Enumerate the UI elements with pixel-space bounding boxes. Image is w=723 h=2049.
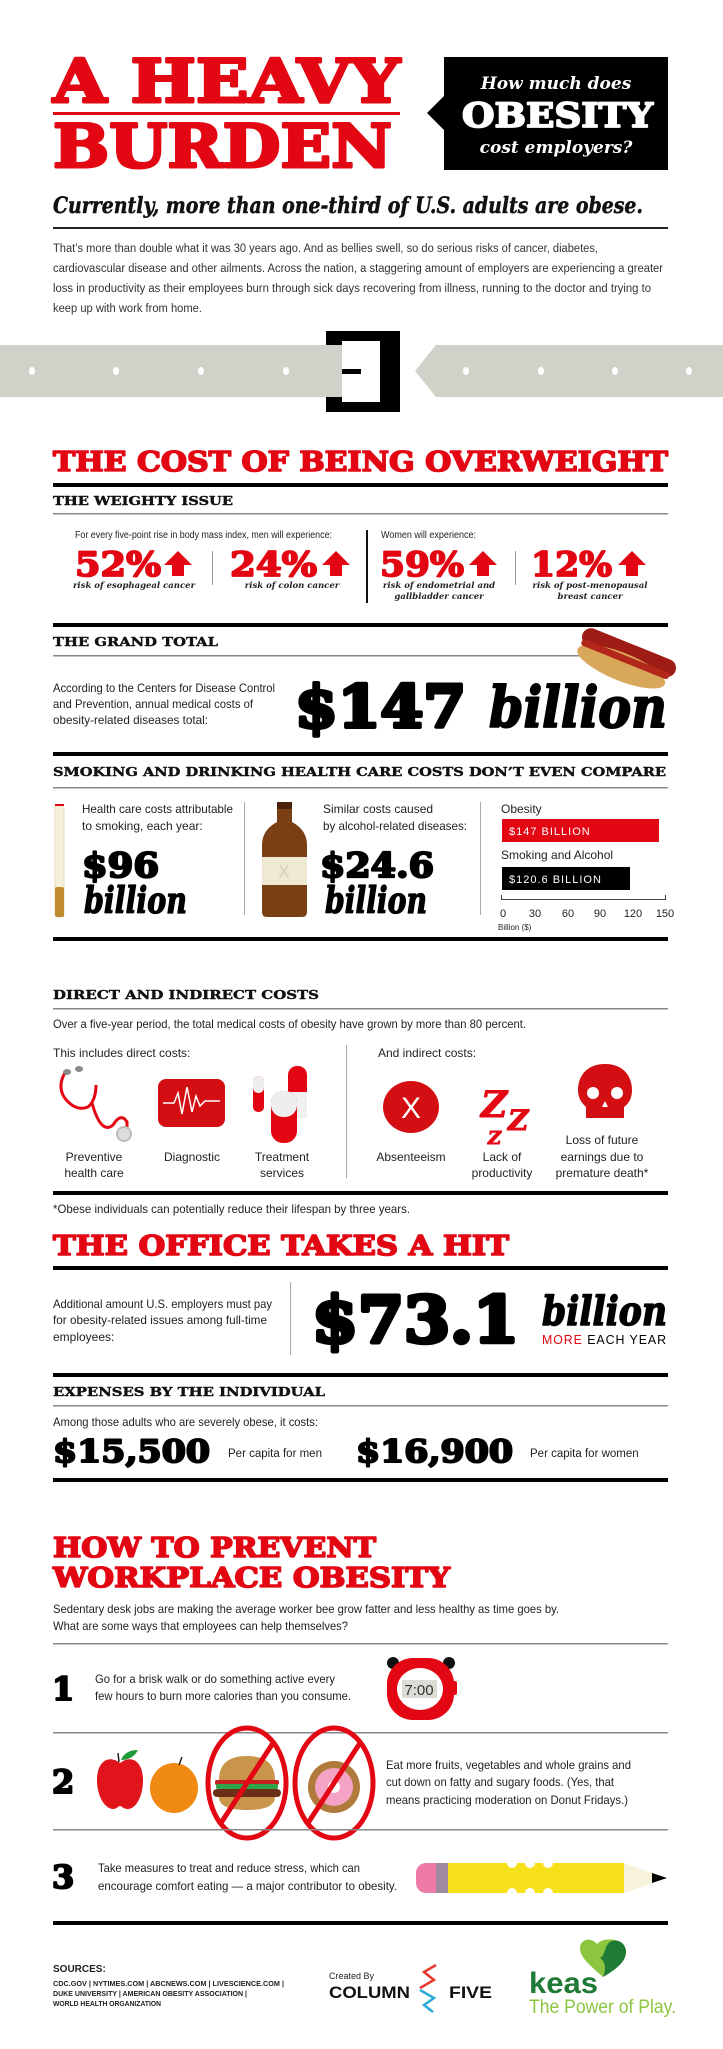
- bar chart: 30: [529, 908, 541, 920]
- bar chart: 90: [594, 908, 606, 920]
- intro paragraph: That’s more than double what it was 30 years ago. And as bellies swell, so do serious risks of cancer, diabetes,: [53, 243, 598, 255]
- heading: how to prevent workplace obesity: WORKPLACE OBESITY: [52, 1563, 451, 1594]
- callout: how much does obesity cost employers: How much does: [480, 74, 632, 94]
- bar chart: 120: [624, 908, 642, 920]
- intro text: prevention: What are some ways that employees can help themselves?: [53, 1619, 348, 1633]
- intro text: prevention: Sedentary desk jobs are making the average worker bee grow fatter and less healthy as time goes by.: [53, 1602, 559, 1616]
- tip 3: [52, 1858, 667, 1898]
- icon: pencil: [416, 1858, 667, 1898]
- panel: the weighty issue: 24%: [230, 545, 317, 585]
- panel: the grand total: $147: [295, 673, 466, 741]
- panel: direct and indirect costs: This includes direct costs:: [53, 1046, 190, 1060]
- panel: the weighty issue: 12%: [531, 545, 612, 585]
- intro paragraph: cardiovascular disease and other ailments. Across the nation, a staggering amount of employers are experiencing a greater: [53, 263, 663, 275]
- tip 3: Take measures to treat and reduce stress, which can: [98, 1861, 360, 1875]
- icon: diagnostic monitor: [158, 1079, 225, 1127]
- panel: the weighty issue: risk of esophageal cancer: [73, 581, 196, 591]
- panel: smoking and drinking comparison: billion: [84, 880, 187, 922]
- tip 1: [52, 1657, 457, 1720]
- panel: direct and indirect costs: [53, 988, 668, 1180]
- heading: the cost of being overweight: THE COST OF BEING OVERWEIGHT: [53, 447, 668, 478]
- logo: column five: FIVE: [449, 1983, 492, 2002]
- panel: employer cost: employees:: [53, 1330, 114, 1344]
- tip 3: encourage comfort eating — a major contributor to obesity.: [98, 1879, 397, 1893]
- callout: how much does obesity cost employers: cost employers?: [480, 138, 633, 158]
- bar chart: $147 BILLION: [509, 826, 591, 838]
- callout: how much does obesity cost employers: [427, 57, 668, 170]
- panel: the grand total: and Prevention, annual medical costs of: [53, 697, 254, 711]
- panel: the grand total: [53, 626, 679, 741]
- panel: the weighty issue: 52%: [75, 545, 161, 585]
- panel: expenses by the individual: EXPENSES BY THE INDIVIDUAL: [53, 1385, 326, 1399]
- panel: the weighty issue: THE WEIGHTY ISSUE: [53, 494, 233, 508]
- icon: pills: [253, 1066, 307, 1143]
- panel: employer cost: Additional amount U.S. employers must pay: [53, 1297, 272, 1311]
- heading: how to prevent workplace obesity: HOW TO PREVENT: [53, 1533, 376, 1564]
- icon: zzz: [479, 1084, 530, 1149]
- intro text: prevention: [53, 1602, 559, 1633]
- footnote: *Obese individuals can potentially reduce their lifespan by three years.: [53, 1202, 410, 1216]
- panel: expenses by the individual: $16,900: [356, 1434, 513, 1470]
- panel: direct and indirect costs: earnings due to: [561, 1150, 644, 1164]
- sources: SOURCES:: [53, 1964, 106, 1975]
- icon: stopwatch: 7:00: [404, 1682, 434, 1699]
- icon: zzz: Z: [479, 1084, 509, 1126]
- panel: direct and indirect costs: Preventive: [66, 1150, 123, 1164]
- bar chart: [498, 802, 674, 932]
- intro paragraph: loss in productivity as their employees burn through sick days recovering from illness, running to the doctor and trying to: [53, 283, 651, 295]
- panel: smoking and drinking comparison: Similar costs caused: [323, 802, 433, 816]
- panel: the grand total: According to the Centers for Disease Control: [53, 681, 275, 695]
- panel: employer cost: $73.1: [312, 1283, 519, 1358]
- heading: how to prevent workplace obesity: [52, 1533, 451, 1594]
- icon: apple: [97, 1750, 143, 1809]
- title: [52, 47, 401, 182]
- icon: stopwatch: [387, 1657, 457, 1720]
- icon: zzz: Z: [487, 1128, 502, 1149]
- panel: direct and indirect costs: Loss of future: [566, 1133, 639, 1147]
- panel: the weighty issue: gallbladder cancer: [394, 592, 484, 602]
- panel: the weighty issue: 59%: [380, 545, 464, 585]
- icon: skull: [578, 1064, 632, 1118]
- belt illustration: [0, 331, 723, 412]
- sources: [53, 1964, 284, 2008]
- icon: absenteeism x circle: [383, 1081, 439, 1133]
- icon: no burger: [208, 1728, 286, 1838]
- intro paragraph: keep up with work from home.: [53, 303, 202, 315]
- title: A HEAVY: [52, 47, 401, 117]
- panel: smoking and drinking comparison: SMOKING AND DRINKING HEALTH CARE COSTS DON’T EVEN COMPARE: [53, 765, 666, 779]
- panel: direct and indirect costs: productivity: [472, 1166, 532, 1180]
- icon: absenteeism x circle: X: [401, 1092, 421, 1125]
- panel: expenses by the individual: Among those adults who are severely obese, it costs:: [53, 1415, 318, 1429]
- panel: employer cost: [53, 1282, 667, 1358]
- heading: the office takes a hit: THE OFFICE TAKES A HIT: [53, 1231, 509, 1262]
- panel: the grand total: billion: [489, 675, 667, 741]
- sources: CDC.GOV | NYTIMES.COM | ABCNEWS.COM | LIVESCIENCE.COM |: [53, 1979, 284, 1988]
- panel: employer cost: MORE EACH YEAR: [542, 1332, 667, 1347]
- callout: how much does obesity cost employers: OBESITY: [462, 96, 654, 136]
- logo: keas: [529, 1939, 676, 2018]
- bar chart: 60: [562, 908, 574, 920]
- icon: bottle: [262, 802, 307, 917]
- bar chart: Smoking and Alcohol: [501, 848, 613, 862]
- tip 3: 3: [52, 1858, 74, 1896]
- icon: stethoscope: [61, 1066, 131, 1141]
- sources: DUKE UNIVERSITY | AMERICAN OBESITY ASSOCIATION |: [53, 1989, 247, 1998]
- icon: hot dog: [571, 626, 679, 699]
- intro paragraph: [53, 243, 663, 315]
- panel: employer cost: for obesity-related issues among full-time: [53, 1313, 267, 1327]
- logo: column five: Created By: [329, 1971, 375, 1981]
- panel: direct and indirect costs: DIRECT AND INDIRECT COSTS: [53, 988, 319, 1002]
- panel: direct and indirect costs: Treatment: [255, 1150, 310, 1164]
- panel: direct and indirect costs: services: [260, 1166, 304, 1180]
- tip 2: [52, 1728, 631, 1838]
- panel: smoking and drinking comparison: $96: [82, 846, 159, 886]
- logo: column five: [329, 1965, 492, 2012]
- panel: the weighty issue: [53, 494, 668, 603]
- panel: smoking and drinking comparison: $24.6: [320, 846, 434, 886]
- tip 1: Go for a brisk walk or do something active every: [95, 1672, 335, 1686]
- panel: smoking and drinking comparison: by alcohol-related diseases:: [323, 819, 467, 833]
- sources: WORLD HEALTH ORGANIZATION: [53, 1999, 161, 2008]
- panel: direct and indirect costs: premature death*: [556, 1166, 649, 1180]
- bar chart: Billion ($): [498, 923, 532, 932]
- panel: the weighty issue: risk of post-menopausal: [533, 581, 648, 591]
- panel: expenses by the individual: Per capita for men: [228, 1448, 322, 1460]
- panel: direct and indirect costs: And indirect costs:: [378, 1046, 476, 1060]
- icon: zzz: Z: [507, 1104, 530, 1137]
- bar chart: Obesity: [501, 802, 542, 816]
- icon: bottle: X: [278, 862, 290, 882]
- panel: smoking and drinking comparison: Health care costs attributable: [82, 802, 233, 816]
- panel: the weighty issue: Women will experience:: [381, 530, 476, 541]
- panel: employer cost: billion: [542, 1288, 667, 1335]
- panel: the weighty issue: risk of colon cancer: [245, 581, 340, 591]
- icon: no donut: [295, 1728, 373, 1838]
- panel: direct and indirect costs: Over a five-year period, the total medical costs of obesity have grown by more than 80 percent.: [53, 1017, 526, 1031]
- tip 2: 2: [52, 1763, 74, 1801]
- tip 2: means practicing moderation on Donut Fridays.): [386, 1793, 628, 1807]
- tip 1: 1: [52, 1670, 74, 1708]
- panel: the weighty issue: breast cancer: [558, 592, 623, 602]
- panel: direct and indirect costs: Diagnostic: [164, 1150, 220, 1164]
- tip 2: Eat more fruits, vegetables and whole grains and: [386, 1758, 631, 1772]
- panel: the grand total: obesity-related diseases total:: [53, 713, 208, 727]
- icon: orange: [150, 1757, 198, 1813]
- tip 2: cut down on fatty and sugary foods. (Yes, that: [386, 1775, 615, 1789]
- panel: direct and indirect costs: Lack of: [483, 1150, 522, 1164]
- subtitle: Currently, more than one-third of U.S. adults are obese.: [53, 193, 643, 219]
- logo: keas: The Power of Play.: [529, 1997, 676, 2018]
- panel: smoking and drinking comparison: [53, 765, 674, 932]
- logo: column five: COLUMN: [329, 1983, 410, 2002]
- panel: direct and indirect costs: Absenteeism: [376, 1150, 446, 1164]
- title: BURDEN: [53, 112, 392, 182]
- panel: smoking and drinking comparison: billion: [325, 880, 427, 922]
- tip 1: few hours to burn more calories than you consume.: [95, 1689, 351, 1703]
- panel: the weighty issue: For every five-point rise in body mass index, men will experience:: [75, 530, 332, 541]
- panel: expenses by the individual: $15,500: [53, 1434, 210, 1470]
- panel: the grand total: THE GRAND TOTAL: [53, 635, 219, 649]
- panel: the weighty issue: risk of endometrial and: [383, 581, 495, 591]
- panel: direct and indirect costs: health care: [64, 1166, 124, 1180]
- logo: keas: keas: [529, 1967, 598, 2000]
- panel: smoking and drinking comparison: to smoking, each year:: [82, 819, 203, 833]
- bar chart: 0: [500, 908, 506, 920]
- icon: cigarette: [55, 804, 64, 917]
- panel: expenses by the individual: Per capita for women: [530, 1448, 639, 1460]
- bar chart: 150: [656, 908, 674, 920]
- panel: expenses by the individual: [53, 1385, 668, 1470]
- bar chart: $120.6 BILLION: [509, 874, 602, 886]
